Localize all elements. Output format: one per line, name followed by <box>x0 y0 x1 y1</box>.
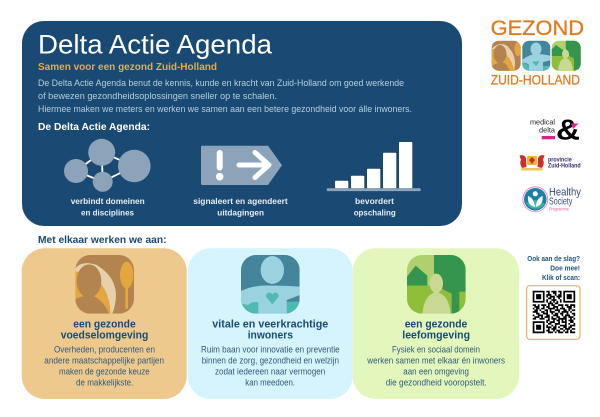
card text: die gezondheid vooropstelt. <box>386 377 487 387</box>
intro text: Hiermee maken we meters en werken we samen aan een betere gezondheid voor álle inwoners. <box>38 104 412 115</box>
call to action text: Doe mee! <box>550 266 580 272</box>
logo: Gezond Zuid-Holland: GEZOND <box>491 17 584 40</box>
card text: aan een omgeving <box>403 367 469 377</box>
logo: Medical Delta: delta <box>539 126 556 135</box>
card text: kan meedoen. <box>245 377 295 387</box>
label: verbindt: en disciplines <box>81 208 134 218</box>
title: Delta Actie Agenda <box>38 30 273 60</box>
label: bevordert <box>354 196 396 218</box>
logo: Gezond Zuid-Holland <box>491 17 584 88</box>
logo: Healthy Society: Programme <box>549 206 570 211</box>
panel: leefomgeving <box>353 248 519 399</box>
logo: Provincie Zuid-Holland <box>520 155 581 170</box>
icon: connected circles <box>64 139 151 192</box>
heading: Met elkaar werken we aan: Met elkaar werken we aan: <box>38 234 166 246</box>
icon: resilient resident <box>241 255 300 314</box>
card heading <box>212 318 328 341</box>
label: bevordert: opschaling <box>354 208 396 218</box>
logo: Medical Delta: medical <box>530 117 555 126</box>
label: verbindt <box>71 196 145 218</box>
card heading: inwoners <box>248 329 293 341</box>
logo: Provincie Zuid-Holland: provincie <box>548 158 572 164</box>
icon: growing bars <box>327 142 421 191</box>
QR code <box>527 286 580 339</box>
card text <box>366 345 506 387</box>
call to action text <box>527 256 580 282</box>
card text: binnen de zorg, gezondheid en welzijn <box>202 356 339 366</box>
card text: maken de gezonde keuze <box>59 367 150 377</box>
intro text <box>38 78 412 115</box>
card text: werken samen met elkaar én inwoners <box>366 356 506 366</box>
logo: Medical Delta <box>530 114 580 146</box>
label: signaleert: signaleert en agendeert <box>193 196 288 206</box>
intro text: of bewezen gezondheidsoplossingen sneller op te schalen. <box>38 91 277 102</box>
icon: healthy living environment <box>407 255 466 314</box>
logo: Medical Delta: & <box>556 114 580 146</box>
card heading: voedselomgeving <box>61 329 148 341</box>
panel: voedselomgeving <box>22 248 187 399</box>
subtitle: Samen voor een gezond Zuid-Holland <box>38 61 217 73</box>
logo: Healthy Society: Society <box>549 196 572 207</box>
intro text: De Delta Actie Agenda benut de kennis, kunde en kracht van Zuid-Holland om goed werkende <box>38 78 404 89</box>
card text: andere maatschappelijke partijen <box>44 356 164 366</box>
card text <box>201 345 340 387</box>
subheading: De Delta Actie Agenda: <box>38 121 150 133</box>
icon: food environment <box>75 255 134 314</box>
card text: de makkelijkste. <box>76 377 133 387</box>
card heading: leefomgeving <box>402 329 470 341</box>
logo: Provincie Zuid-Holland: Zuid-Holland <box>548 164 581 170</box>
label: verbindt: verbindt domeinen <box>71 196 145 206</box>
card heading: een gezonde <box>405 318 467 330</box>
card text <box>44 345 164 387</box>
card text: zodat iedereen naar vermogen <box>215 367 325 377</box>
card heading: vitale en veerkrachtige <box>212 318 328 330</box>
call to action text: Ook aan de slag? <box>527 256 580 263</box>
panel: inwoners <box>188 248 353 399</box>
icon: signal tag with arrow <box>201 146 282 185</box>
logo: Gezond Zuid-Holland: ZUID-HOLLAND <box>491 72 580 88</box>
card heading <box>61 318 148 341</box>
card heading: een gezonde <box>73 318 136 330</box>
label: bevordert: bevordert <box>355 196 394 206</box>
card text: Overheden, producenten en <box>54 345 155 355</box>
label: signaleert: uitdagingen <box>217 208 264 218</box>
logo: Healthy Society <box>523 187 581 212</box>
card heading <box>402 318 470 341</box>
card text: Ruim baan voor innovatie en preventie <box>201 345 340 355</box>
label: signaleert <box>193 196 288 218</box>
call to action text: Klik of scan: <box>542 275 580 282</box>
card text: Fysiek en sociaal domein <box>392 345 480 355</box>
logo: Healthy Society: Healthy <box>549 187 581 199</box>
panel: Delta Actie Agenda header <box>22 21 462 226</box>
